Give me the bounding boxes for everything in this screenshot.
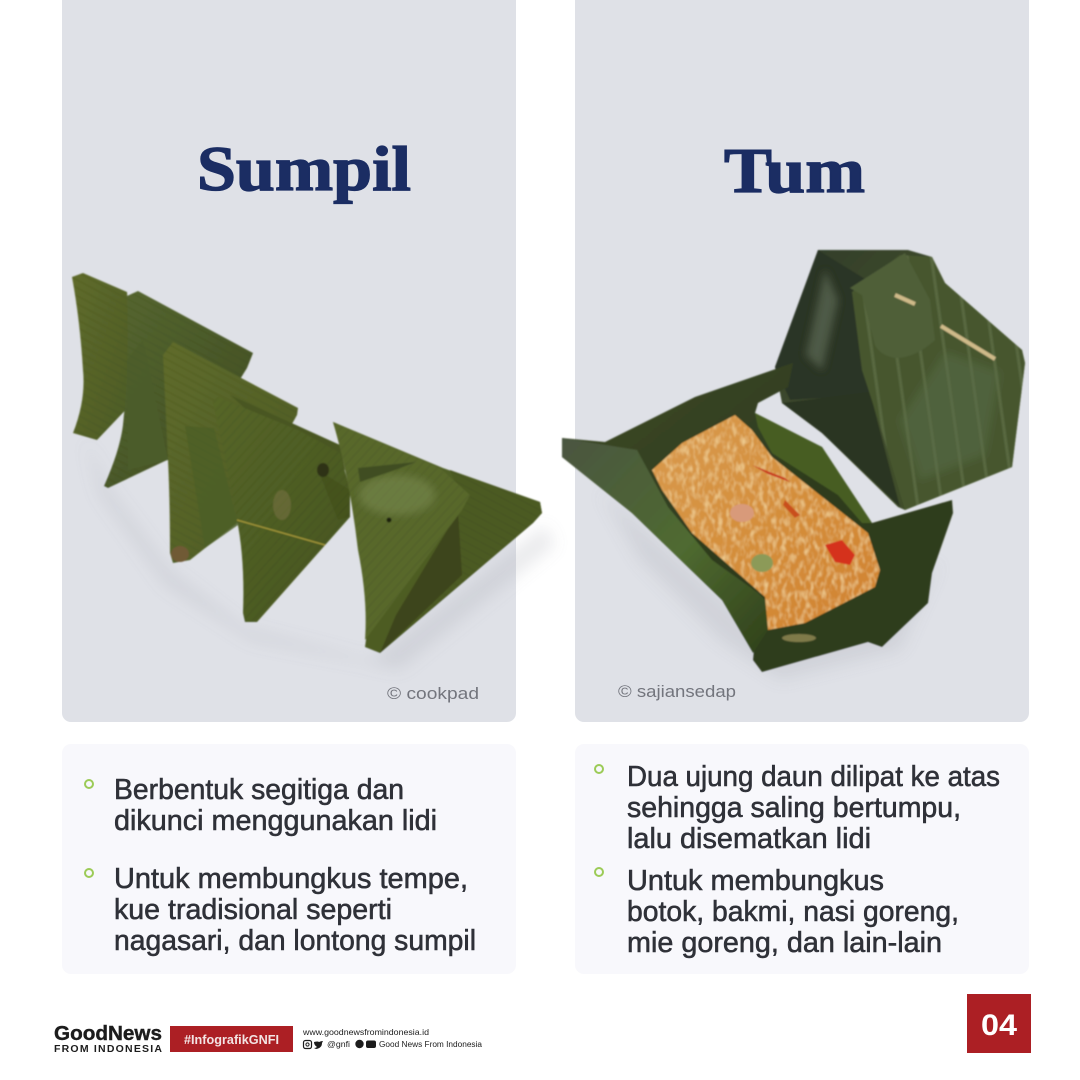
- photo: tum parcels in banana leaf: [562, 250, 1025, 680]
- footer: brand logo: GoodNews: [54, 1022, 162, 1045]
- bullet: tum folding: [595, 761, 1000, 855]
- bullet: tum folding: Dua ujung daun dilipat ke atas: [627, 761, 1000, 793]
- footer: brand logo: [54, 1022, 162, 1055]
- photo: five sumpil leaf parcels: [72, 273, 555, 670]
- heading: Sumpil: Sumpil: [197, 134, 411, 204]
- bullet: sumpil uses: Untuk membungkus tempe,: [114, 863, 468, 895]
- footer: hashtag badge: [170, 1026, 293, 1052]
- panel: sumpil description: [62, 744, 516, 974]
- bullet: tum folding: lalu disematkan lidi: [627, 823, 871, 855]
- credit: cookpad: © cookpad: [387, 684, 479, 703]
- bullet: tum uses: Untuk membungkus: [627, 865, 884, 897]
- panel: sumpil image card: [62, 0, 555, 722]
- panel: tum image card: [562, 0, 1029, 722]
- page number: 04: [981, 1009, 1017, 1042]
- footer: website and socials: www.goodnewsfromindonesia.id: [302, 1027, 429, 1037]
- panel: tum description: [575, 744, 1029, 974]
- bullet: sumpil shape: dikunci menggunakan lidi: [114, 805, 437, 837]
- bullet: tum uses: mie goreng, dan lain-lain: [627, 927, 942, 959]
- bullet: sumpil shape: Berbentuk segitiga dan: [114, 774, 404, 806]
- bullet: tum folding: sehingga saling bertumpu,: [627, 792, 961, 824]
- footer: hashtag badge: #InfografikGNFI: [184, 1032, 279, 1047]
- footer: website and socials: [302, 1027, 483, 1049]
- bullet: sumpil uses: nagasari, dan lontong sumpil: [114, 925, 476, 957]
- bullet: sumpil shape: [85, 774, 437, 837]
- bullet: sumpil uses: [85, 863, 476, 957]
- bullet: sumpil uses: kue tradisional seperti: [114, 894, 392, 926]
- credit: sajiansedap: © sajiansedap: [618, 682, 736, 701]
- bullet: tum uses: botok, bakmi, nasi goreng,: [627, 896, 959, 928]
- footer: website and socials: Good News From Indonesia: [379, 1040, 483, 1049]
- footer: website and socials: @gnfi: [327, 1040, 350, 1049]
- footer: brand logo: FROM INDONESIA: [54, 1043, 162, 1055]
- heading: Tum: Tum: [724, 136, 865, 206]
- page number: [967, 994, 1031, 1053]
- bullet: tum uses: [595, 865, 959, 959]
